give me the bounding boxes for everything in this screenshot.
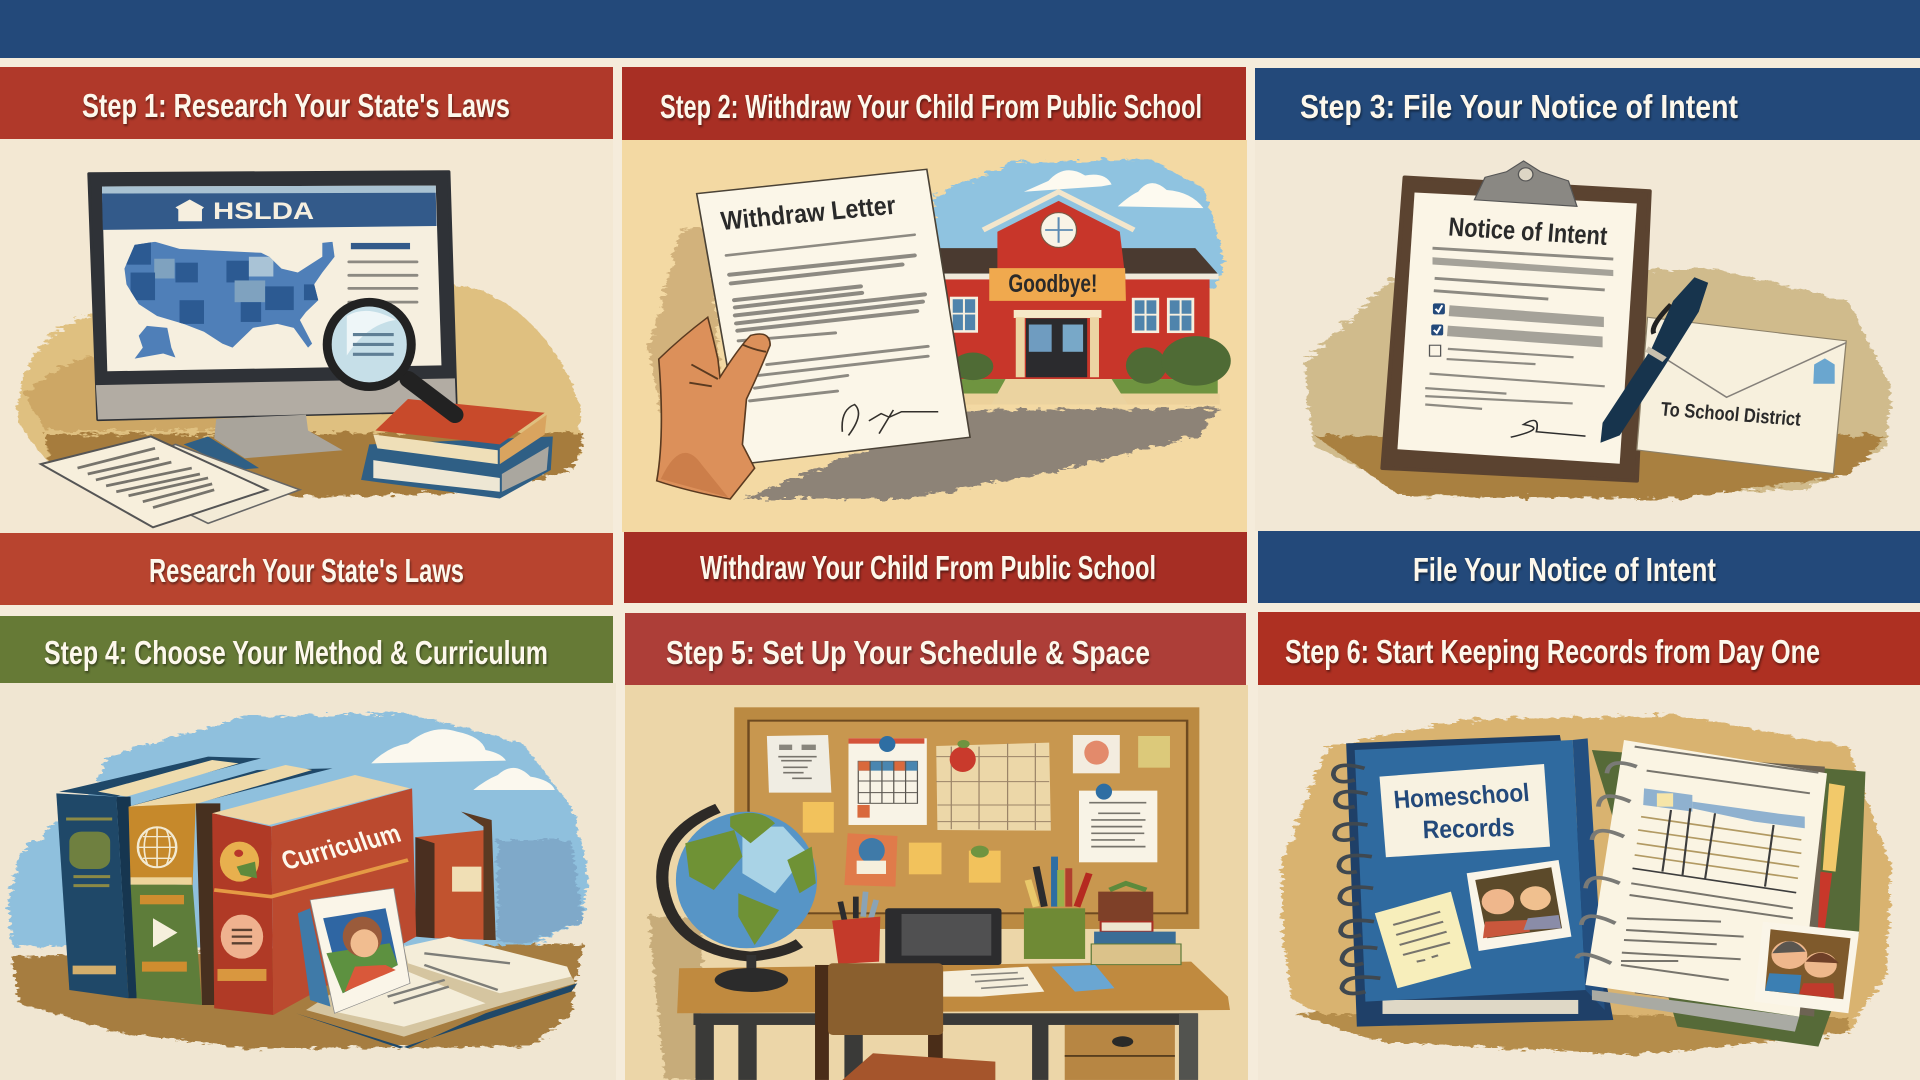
panel 6: start keeping records [1258,612,1920,1080]
top banner [0,0,1920,58]
school building [938,192,1220,405]
illustration: letter in hand with school [649,159,1231,499]
Alaska [135,326,175,359]
step 1 header: Step 1: Research Your State's Laws [82,87,510,124]
cork board [734,707,1199,929]
red curriculum book: Curriculum [278,819,405,876]
clouds [1024,170,1203,208]
bushes [953,336,1231,386]
clipboard [1382,161,1650,481]
hand [657,317,770,499]
panel 1: research your state's laws [0,67,613,605]
withdraw letter [697,169,970,464]
tan brush backdrop [17,284,583,496]
papers [41,436,300,527]
chair [815,963,995,1080]
illustration: clipboard, pen and envelope [1303,161,1891,499]
US map [124,242,334,348]
brush backdrop [649,159,1224,499]
binder rings [1333,765,1380,994]
step 1 footer bar: Research Your State's Laws [149,552,464,589]
loose family photo [1754,922,1859,1013]
yellow and green book [129,765,333,1005]
red curriculum book [212,775,416,1015]
step 5 header [625,613,1246,685]
homeschool records label: Homeschool [1393,779,1531,814]
wall shadow [649,917,702,1080]
step 2 header: Step 2: Withdraw Your Child From Public School [660,88,1202,125]
blue book [56,757,261,998]
monitor [89,172,456,458]
step 2 header [622,67,1246,140]
rear small book [415,812,496,940]
Goodbye banner [989,268,1126,301]
pen holders, monitor and stack of books [832,857,1181,965]
desk [677,962,1230,1080]
HSLDA logo: HSLDA [213,198,314,225]
envelope: To School District [1660,398,1802,430]
panel 3: file your notice of intent [1255,68,1920,603]
magnifying glass [327,302,455,415]
screen text lines [349,243,417,302]
binder photo [1467,860,1571,951]
sticky note [1375,892,1471,988]
step 2 footer bar [624,532,1247,603]
globe [662,808,817,992]
illustration: curriculum books [8,713,588,1048]
papers and blue notebook on desk [940,965,1114,997]
step 3 header: Step 3: File Your Notice of Intent [1300,88,1738,125]
clouds [371,729,555,790]
panel 5: set up your schedule and space [625,613,1248,1080]
step 5 header: Step 5: Set Up Your Schedule & Space [666,634,1150,671]
red and blue books [361,399,553,498]
sheet rings [1577,763,1637,963]
brush backdrop [1282,715,1891,1055]
form lines and checkboxes [1425,248,1613,437]
step 3 footer bar [1258,531,1920,603]
illustration: cork board and desk [649,707,1230,1080]
envelope [1637,317,1846,474]
records sheet with table [1586,740,1827,1032]
panel 2: withdraw your child [622,67,1247,603]
withdraw letter: Withdraw Letter [719,190,897,236]
step 3 footer bar: File Your Notice of Intent [1413,551,1716,588]
blue binder [1346,735,1613,1027]
step 3 header [1255,68,1920,140]
Goodbye banner: Goodbye! [1008,269,1097,297]
step 6 header [1258,612,1920,685]
homeschool records label: Records [1422,814,1515,844]
step 4 header [0,616,613,683]
panel 4: choose your method and curriculum [0,616,616,1080]
homeschool records label [1380,764,1550,857]
step 2 footer bar: Withdraw Your Child From Public School [700,549,1156,586]
step 4 header: Step 4: Choose Your Method & Curriculum [44,634,548,671]
open book [296,937,577,1048]
pen [1600,277,1708,443]
notice of intent heading: Notice of Intent [1447,213,1609,251]
pinned notes and calendars [767,735,1170,887]
illustration: computer with HSLDA map, magnifier, books and papers [17,172,583,527]
green folder and tabs [1592,750,1865,1047]
step 1 header [0,67,613,139]
brush backdrop [1303,268,1891,499]
sky and ground brush backdrop [8,713,588,1048]
step 1 footer bar [0,533,613,605]
portrait card [298,888,410,1013]
HSLDA logo [175,198,314,225]
illustration: records binders [1282,715,1891,1055]
